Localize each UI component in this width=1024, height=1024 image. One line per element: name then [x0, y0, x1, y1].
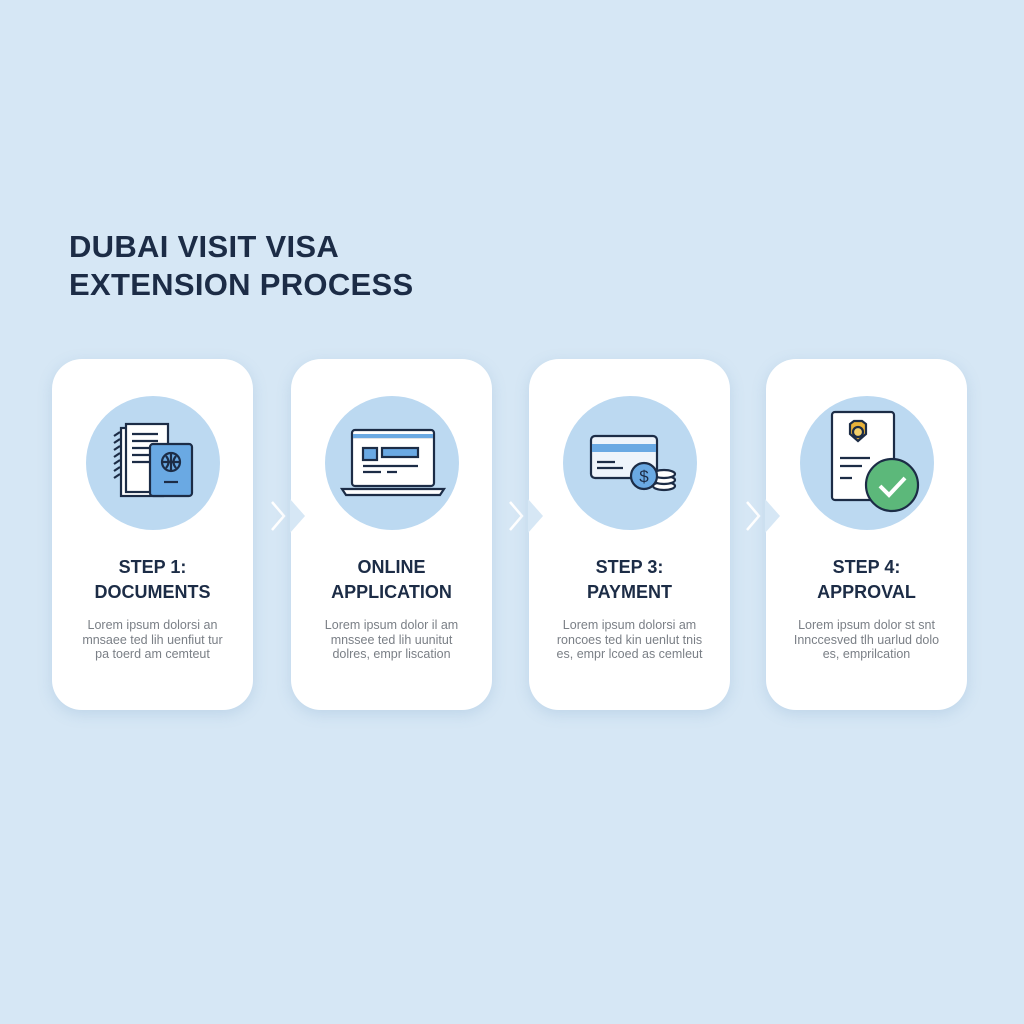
panel: step 4 approval [766, 359, 967, 710]
title: DUBAI VISIT VISA [69, 229, 339, 264]
text block: Lorem ipsum dolorsi am roncoes ted kin uenlut tnis es, empr lcoed as cemleut [557, 618, 702, 661]
heading [587, 557, 672, 602]
heading [817, 557, 916, 602]
heading: APPROVAL [817, 582, 916, 602]
panel: step 1 documents [52, 359, 253, 710]
icon: card and coins: $ [639, 467, 649, 486]
title: EXTENSION PROCESS [69, 267, 413, 302]
heading [94, 557, 210, 602]
text block: Lorem ipsum dolorsi an mnsaee ted lih uenfiut tur pa toerd am cemteut [82, 618, 223, 661]
icon: approved document [800, 396, 934, 530]
panel: step 3 payment [529, 359, 730, 710]
icon: laptop [325, 396, 459, 530]
heading [331, 557, 452, 602]
arrow [746, 501, 760, 531]
title [69, 229, 413, 302]
icon: documents and passport [86, 396, 220, 530]
text block: Lorem ipsum dolor il am mnssee ted lih uunitut dolres, empr liscation [325, 618, 458, 661]
heading: DOCUMENTS [94, 582, 210, 602]
heading: ONLINE [357, 557, 426, 577]
icon: card and coins [563, 396, 697, 530]
arrow [509, 501, 524, 531]
heading: STEP 4: [833, 557, 900, 577]
heading: PAYMENT [587, 582, 672, 602]
panel: step 2 online application [291, 359, 492, 710]
heading: STEP 3: [596, 557, 663, 577]
heading: APPLICATION [331, 582, 452, 602]
text block: Lorem ipsum dolor st snt Innccesved tlh uarlud dolo es, emprilcation [794, 618, 939, 661]
arrow [271, 501, 286, 531]
heading: STEP 1: [119, 557, 186, 577]
